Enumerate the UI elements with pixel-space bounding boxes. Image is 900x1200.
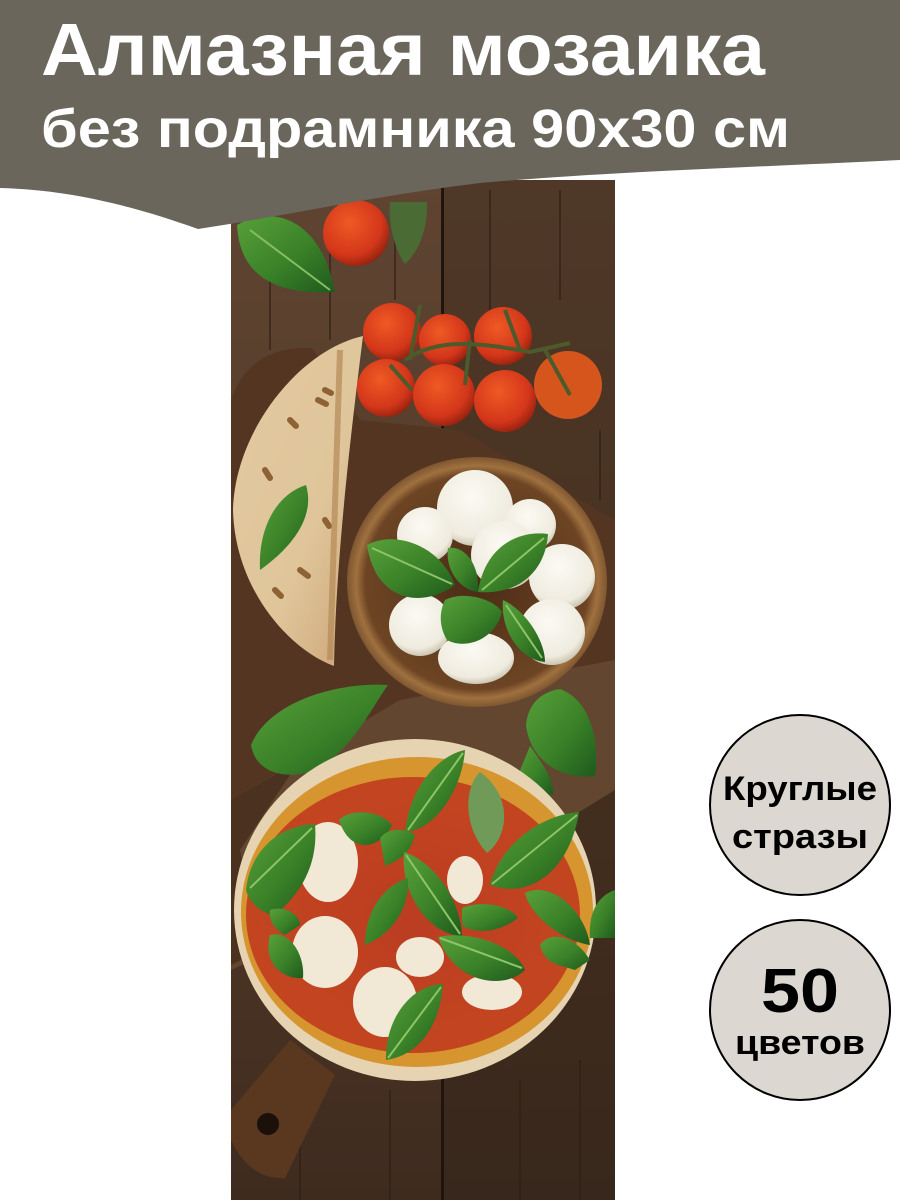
cutting board	[231, 348, 615, 1178]
header banner	[0, 0, 900, 229]
badge: 50 colours: цветов	[735, 1024, 865, 1062]
badge: 50 colours: 50	[761, 957, 839, 1026]
badge: 50 colours	[710, 920, 890, 1100]
flatbread	[233, 336, 363, 666]
basil on pizza	[246, 750, 615, 1060]
subtitle: без подрамника 90х30 см	[41, 99, 790, 159]
cherry tomatoes on the vine	[357, 303, 602, 432]
badge: round rhinestones: Круглые	[723, 770, 877, 808]
badge: round rhinestones: стразы	[732, 818, 868, 856]
pizza	[234, 739, 615, 1081]
loose basil leaves	[251, 685, 596, 795]
title: Алмазная мозаика	[41, 8, 766, 91]
basil on mozzarella	[367, 533, 548, 662]
bowl of mozzarella	[347, 457, 607, 707]
wood planks	[231, 180, 615, 1200]
mozzarella patches	[292, 822, 522, 1037]
badge: round rhinestones	[710, 715, 890, 895]
product image: pizza composition on wood	[231, 180, 615, 1200]
top basil and tomato	[237, 200, 427, 292]
